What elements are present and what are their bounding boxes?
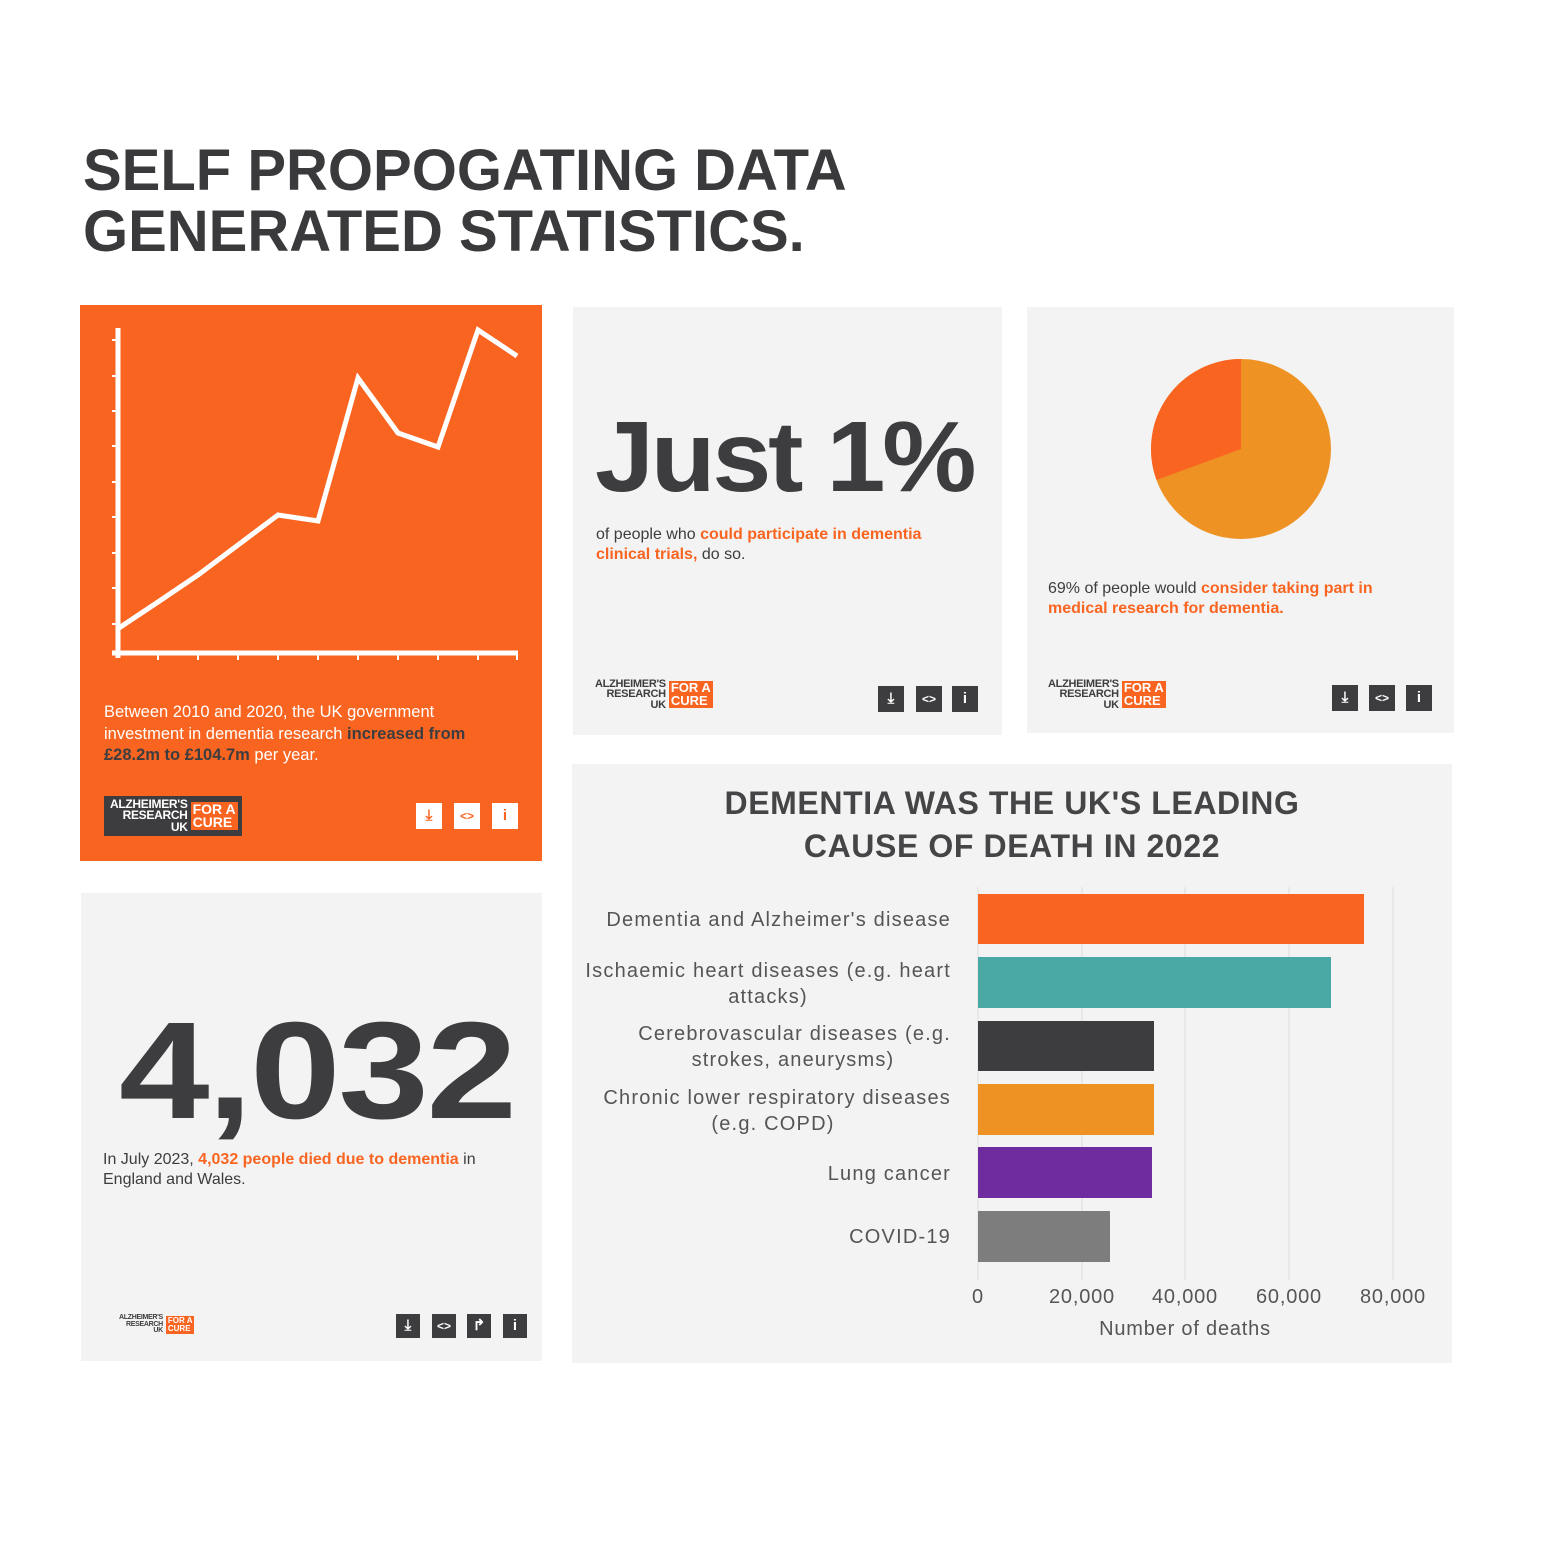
bar chart: 20,000 [1049,1286,1115,1308]
logo: CURE [193,814,232,830]
logo: ALZHEIMER'S [110,797,188,811]
logo [119,1314,194,1334]
panel: pie chart: <> [1375,691,1389,705]
title [83,138,847,264]
panel: investment line chart: <> [460,809,474,823]
title: GENERATED STATISTICS. [83,199,805,264]
logo: CURE [168,1324,191,1333]
logo: UK [651,699,666,711]
chart title: CAUSE OF DEATH IN 2022 [804,828,1220,864]
icons [396,1314,420,1338]
logo: ALZHEIMER'S [119,1314,163,1321]
icons: ⤓ [1342,689,1348,706]
bar chart: 80,000 [1360,1286,1426,1308]
logo [1048,678,1166,711]
bar chart: 0 [972,1286,984,1308]
logo: UK [153,1327,163,1334]
bar chart: strokes, aneurysms) [692,1049,894,1071]
logo: UK [1104,699,1119,711]
bar chart: 40,000 [1152,1286,1218,1308]
icons: ⤓ [405,1317,411,1334]
icons: ⤓ [888,690,894,707]
panel: 4,032 [81,893,542,1361]
logo: ALZHEIMER'S [595,678,666,690]
logo: CURE [671,693,708,708]
big stat: 4,032 [119,994,515,1148]
panel: 4,032: ↱ [473,1317,485,1334]
logo: FOR A [671,680,711,695]
logo: UK [171,820,188,834]
caption: Between 2010 and 2020, the UK government investment in dementia research increased from £28.2m to £104.7m per year. [104,703,465,764]
panel: just 1% [573,307,1002,735]
bar chart [585,887,1426,1340]
panel: just 1%: <> [922,692,936,706]
logo: RESEARCH [123,808,188,822]
logo: RESEARCH [606,688,666,700]
icons: ⤓ [426,807,432,824]
logo: CURE [1124,693,1161,708]
bar chart: Cerebrovascular diseases (e.g. [638,1023,951,1045]
caption: In July 2023, 4,032 people died due to dementia in England and Wales. [103,1151,476,1188]
bar chart: COVID-19 [849,1226,951,1248]
title: SELF PROPOGATING DATA [83,138,847,203]
bar chart: Dementia and Alzheimer's disease [606,909,951,931]
logo: FOR A [193,801,236,817]
panel: investment line chart: i [503,807,507,824]
logo: RESEARCH [126,1321,163,1328]
panel: pie chart: i [1417,689,1421,706]
panel: pie chart [1027,307,1454,733]
logo [595,678,713,711]
icons [878,686,904,712]
panel: causes of death bar chart [572,764,1452,1363]
panel: 4,032: <> [437,1319,451,1333]
chart title: DEMENTIA WAS THE UK'S LEADING [725,785,1299,821]
logo: FOR A [1124,680,1164,695]
logo: FOR A [168,1316,192,1325]
caption: of people who could participate in dementia clinical trials, do so. [596,526,921,563]
bar chart: Chronic lower respiratory diseases [603,1087,951,1109]
bar chart: 60,000 [1256,1286,1322,1308]
bar chart: attacks) [728,986,808,1008]
panel: investment line chart [80,305,542,861]
logo [104,796,242,836]
bar chart: Lung cancer [828,1163,951,1185]
big stat: Just 1% [595,401,973,513]
panel: just 1%: i [963,690,967,707]
bar chart: Ischaemic heart diseases (e.g. heart [585,960,951,982]
bar chart: Number of deaths [1099,1318,1271,1340]
logo: RESEARCH [1059,688,1119,700]
icons [1332,685,1358,711]
bar chart: (e.g. COPD) [711,1113,835,1135]
pie chart [1151,359,1331,539]
icons [416,803,442,829]
caption: 69% of people would consider taking part in medical research for dementia. [1048,580,1373,617]
line chart [112,326,518,660]
chart title [725,785,1299,864]
logo: ALZHEIMER'S [1048,678,1119,690]
panel: 4,032: i [513,1317,517,1334]
